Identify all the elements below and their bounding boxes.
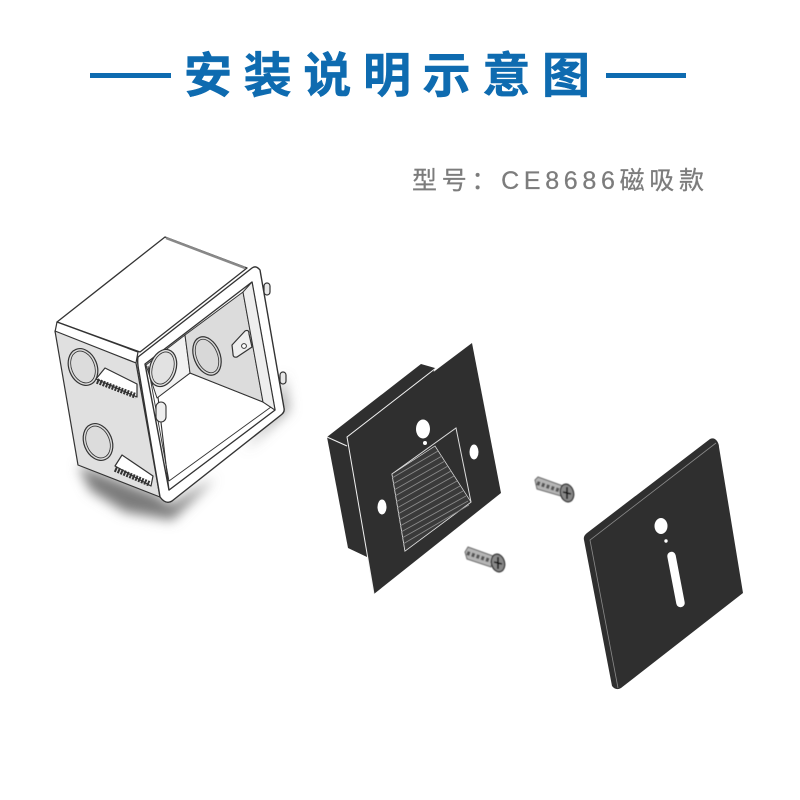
left side face (55, 331, 160, 497)
lower screw post (115, 455, 153, 486)
interior screw tab (232, 330, 252, 357)
interior bottom (158, 373, 275, 490)
cover indicator dot (664, 539, 668, 543)
lower interior lug (156, 402, 166, 422)
right lugs (264, 283, 286, 384)
interior back wall (185, 292, 263, 402)
upper screw post (96, 368, 137, 397)
plate edge highlight (347, 368, 436, 594)
box shadow (78, 375, 290, 520)
left side rim (55, 322, 138, 363)
screw lower (465, 547, 507, 573)
interior knockout far (187, 333, 227, 379)
interior lip lines (148, 366, 271, 481)
left screw hole (378, 500, 386, 514)
left side knockout lower (78, 419, 118, 465)
left side knockout upper (63, 344, 103, 390)
box top face (57, 237, 247, 352)
mounting box illustration (55, 237, 290, 520)
interior knockout near (145, 346, 181, 390)
model number label: 型号：CE8686磁吸款 (412, 167, 704, 195)
cover hole (654, 518, 668, 534)
interior right wall (243, 282, 275, 410)
cover bevel line (590, 443, 716, 688)
right screw hole (470, 444, 478, 460)
interior left wall (146, 335, 190, 398)
cover plate body (584, 438, 743, 689)
screw upper (535, 477, 576, 503)
light window (392, 428, 471, 551)
lamp rear body (327, 364, 435, 557)
magnetic cover plate (584, 438, 743, 689)
indicator dot (423, 441, 427, 445)
lamp face plate (347, 343, 501, 594)
title with side rules: 安装说明示意图 (184, 36, 590, 106)
lamp module (327, 343, 501, 594)
cover light slot (672, 556, 680, 603)
title with side rules (90, 36, 686, 106)
back edge highlight (166, 238, 245, 268)
plate top hole (416, 420, 430, 438)
body highlight (327, 437, 347, 446)
front frame (138, 267, 284, 502)
